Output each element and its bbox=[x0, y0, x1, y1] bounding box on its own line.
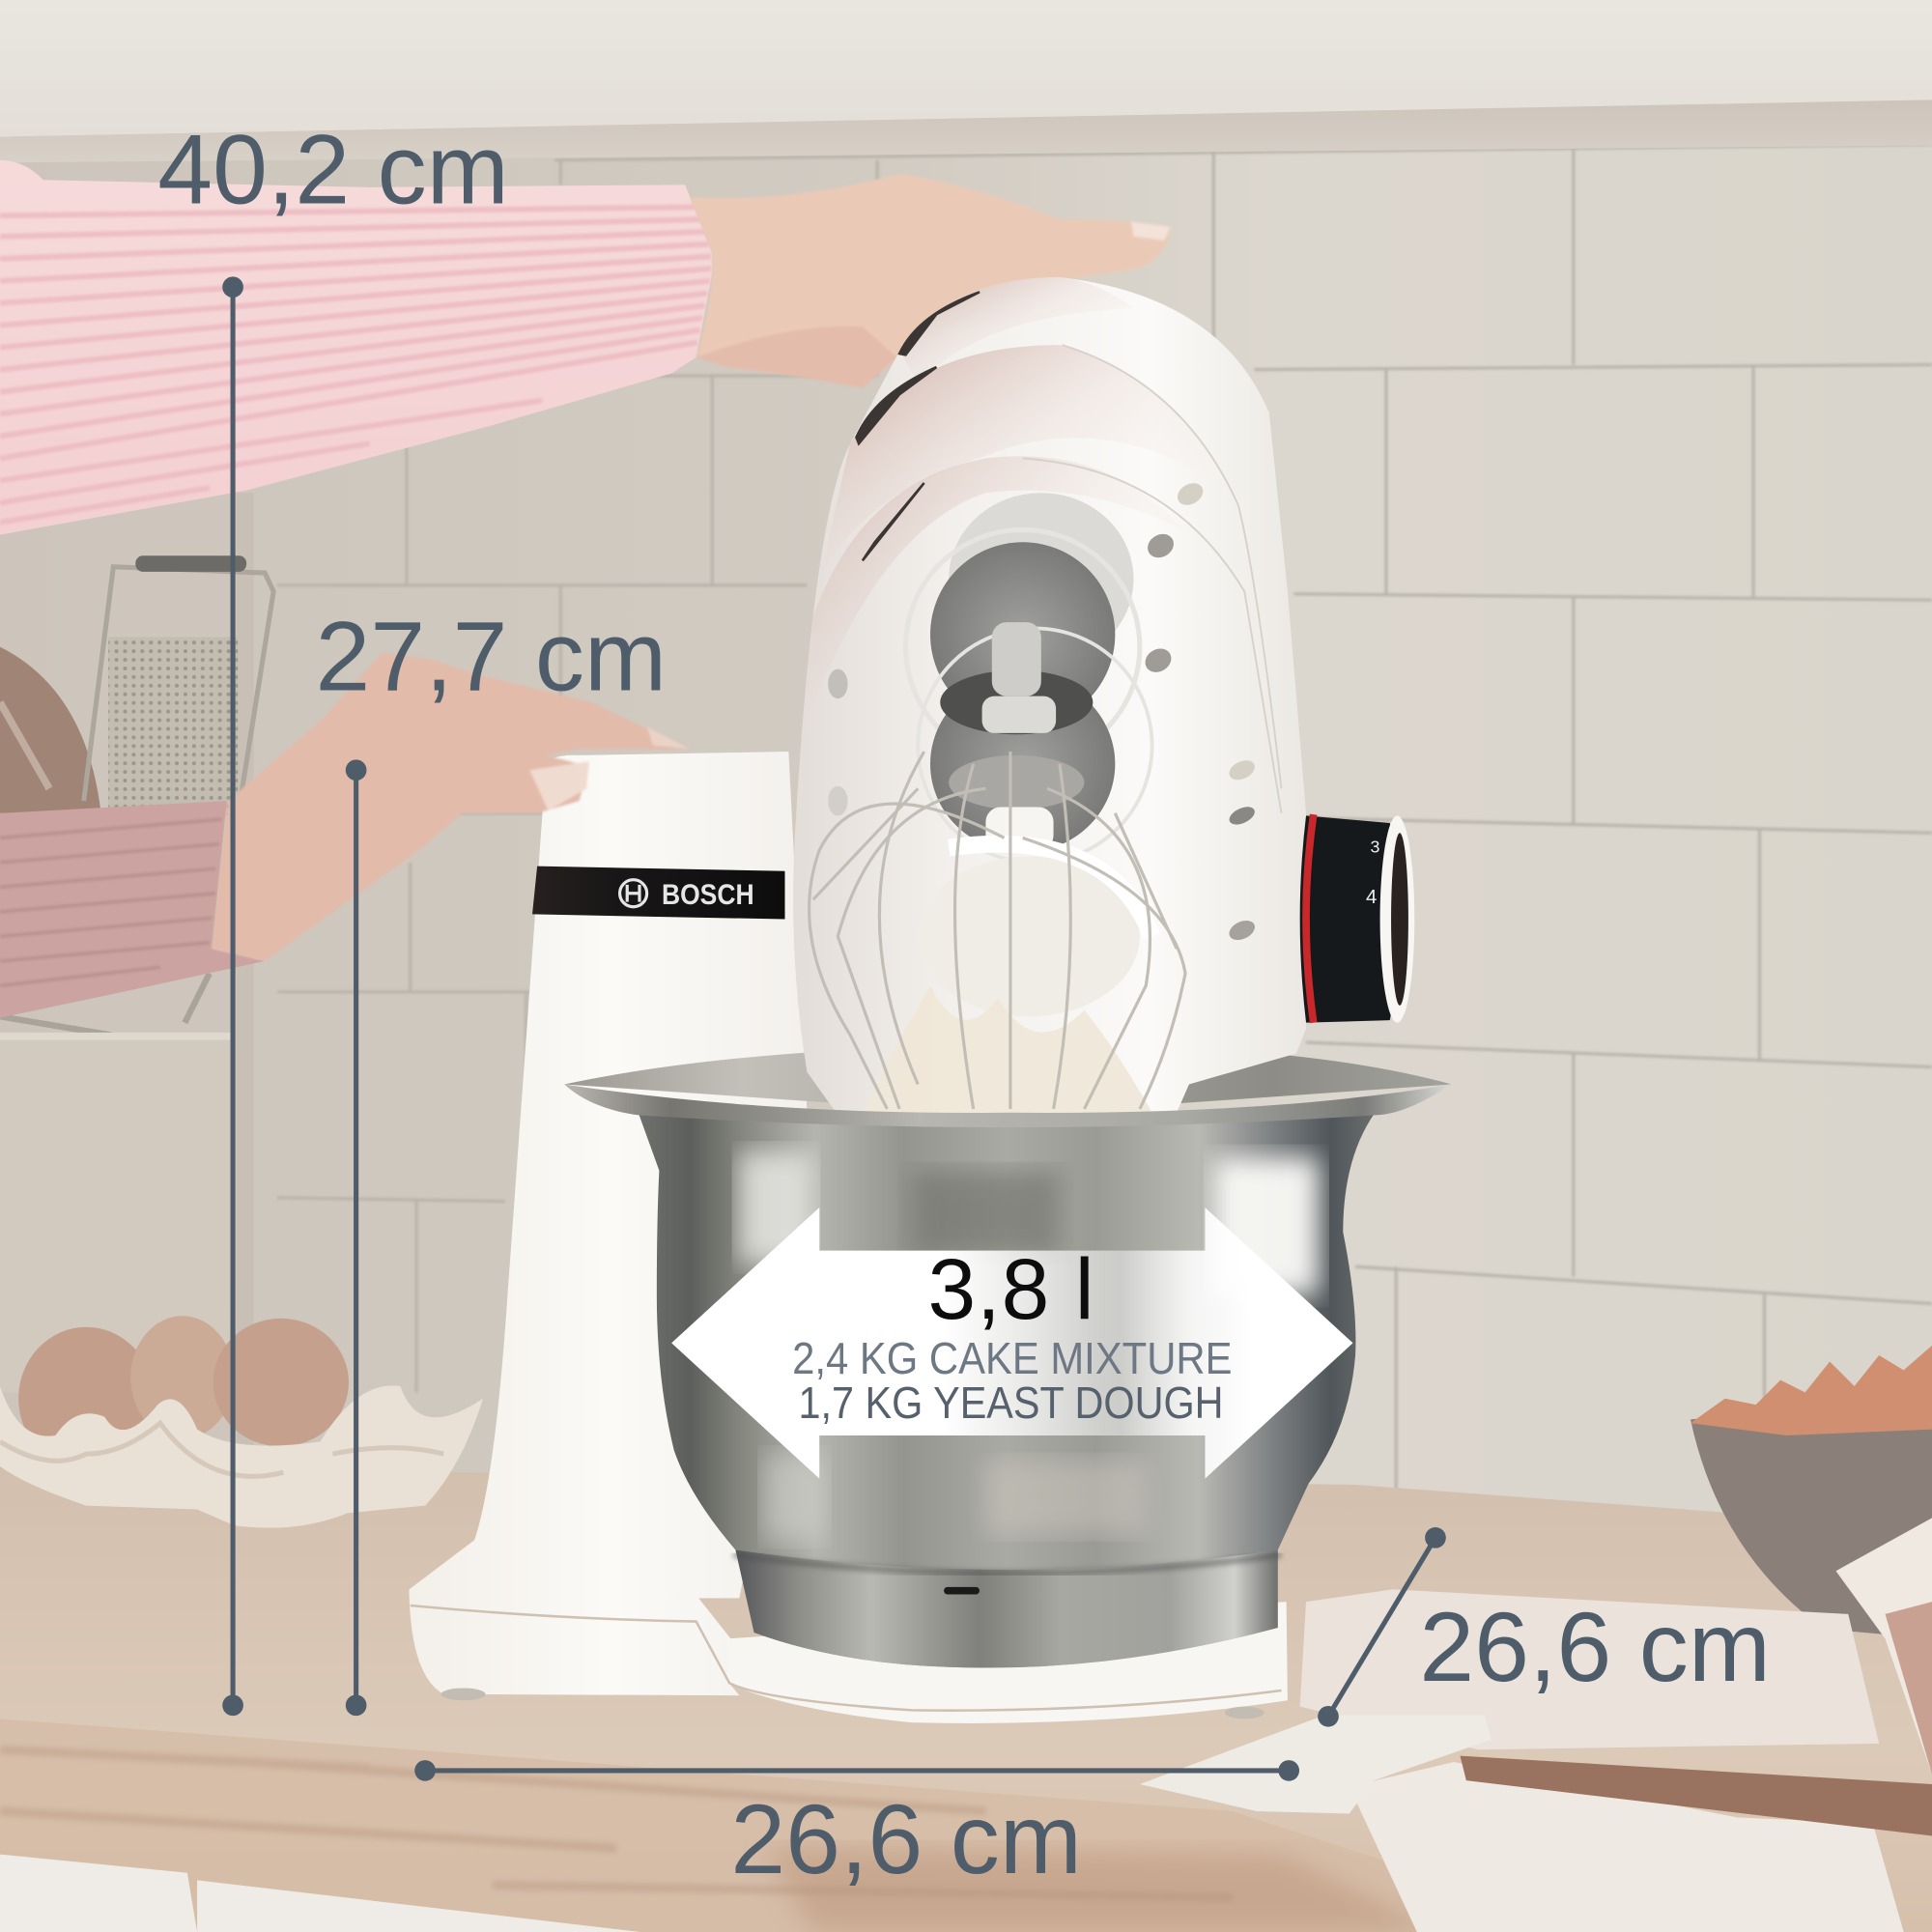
rolling pin bbox=[1460, 1756, 1932, 1836]
whisk wires bbox=[810, 752, 1185, 1109]
steel bowl bbox=[564, 1084, 1452, 1668]
depth line bbox=[1318, 1527, 1446, 1727]
mixer bbox=[409, 277, 1452, 1723]
right bowl with carrots bbox=[1690, 1346, 1932, 1638]
label 27,7 cm: 27,7 cm bbox=[316, 601, 667, 711]
label width 26,6 cm: 26,6 cm bbox=[730, 1784, 1082, 1894]
dial: 4 bbox=[1366, 887, 1377, 908]
label depth 26,6 cm: 26,6 cm bbox=[1419, 1592, 1771, 1702]
lower hand bbox=[212, 653, 690, 961]
front rim bbox=[564, 1084, 1452, 1127]
dial: 3 bbox=[1371, 838, 1380, 857]
height line 27,7 cm bbox=[346, 759, 366, 1716]
upper hand bbox=[690, 174, 1171, 388]
black band with logo: BOSCH bbox=[662, 879, 754, 911]
dish at right bbox=[1836, 1518, 1932, 1775]
black band with logo bbox=[532, 867, 784, 920]
label 40,2 cm: 40,2 cm bbox=[157, 114, 509, 224]
capacity details: 1,7 KG YEAST DOUGH bbox=[799, 1378, 1224, 1428]
towel bbox=[1300, 1589, 1904, 1932]
mixer head ghosted bbox=[793, 277, 1306, 1115]
height line 40,2 cm bbox=[222, 276, 243, 1716]
lower sleeve bbox=[0, 801, 265, 1018]
white scraper bbox=[1140, 1716, 1491, 1814]
upper sleeve bbox=[0, 160, 712, 535]
capacity arrow bbox=[671, 1208, 1353, 1479]
whisk foam bbox=[863, 985, 1152, 1115]
crock bbox=[0, 1033, 234, 1392]
bowl interior back rim bbox=[564, 1044, 1452, 1115]
egg tray bbox=[0, 1316, 483, 1528]
mixer column and base bbox=[409, 752, 1288, 1723]
dial bbox=[1300, 814, 1414, 1023]
capacity details: 2,4 KG CAKE MIXTURE bbox=[792, 1333, 1233, 1383]
grater and utensil bbox=[0, 555, 273, 1035]
shelf at top bbox=[0, 0, 1932, 162]
capacity value: 3,8 l bbox=[927, 1240, 1094, 1337]
capacity details bbox=[792, 1333, 1233, 1428]
width line bbox=[414, 1760, 1299, 1781]
countertop bbox=[0, 1466, 1932, 1932]
